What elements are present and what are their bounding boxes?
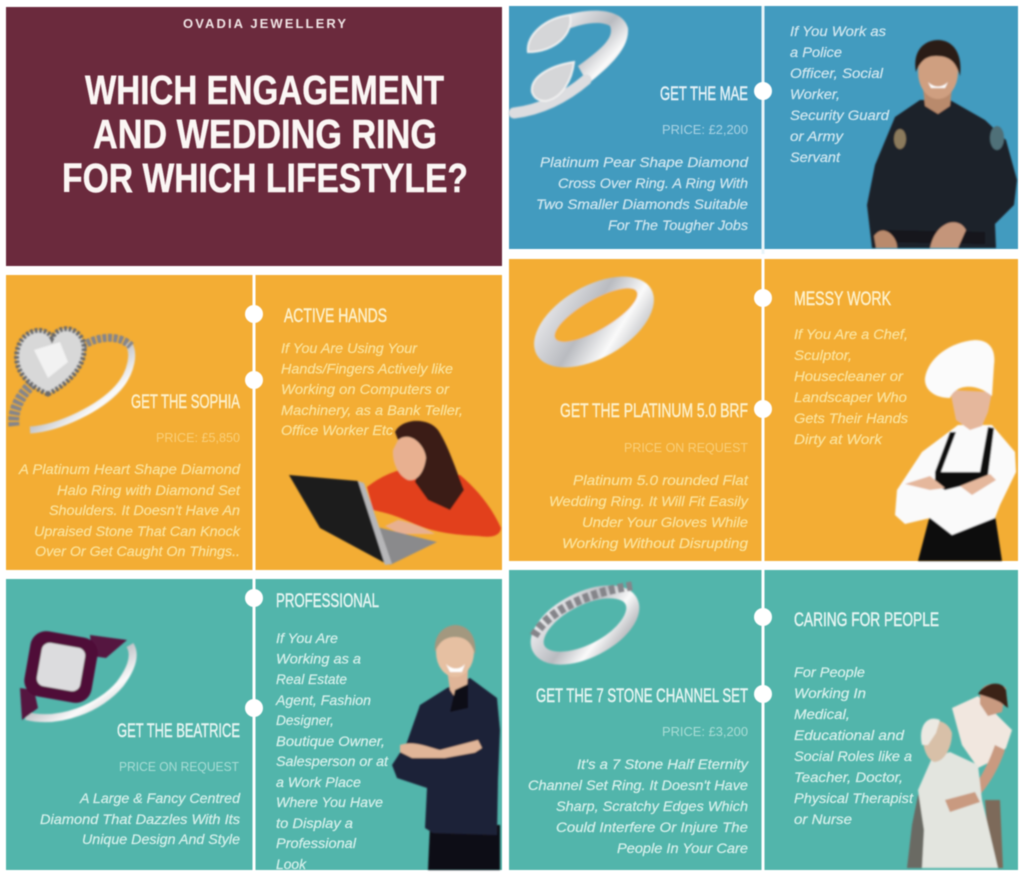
ring description: Could Interfere Or Injure The xyxy=(556,820,748,835)
lifestyle description: Dirty at Work xyxy=(794,432,883,447)
ring name: GET THE 7 STONE CHANNEL SET xyxy=(536,686,748,707)
lifestyle description: Teacher, Doctor, xyxy=(794,770,903,785)
ring description: Wedding Ring. It Will Fit Easily xyxy=(549,494,749,509)
lifestyle heading: MESSY WORK xyxy=(794,289,891,310)
lifestyle description: Landscaper Who xyxy=(794,390,908,405)
lifestyle description: Gets Their Hands xyxy=(794,411,908,426)
ring description: Cross Over Ring. A Ring With xyxy=(558,176,748,191)
lifestyle description: Where You Have xyxy=(276,795,383,810)
brand name: OVADIA JEWELLERY xyxy=(183,16,346,31)
panel: mae / police xyxy=(509,6,1018,256)
icon: chef xyxy=(895,340,1016,561)
ring description: A Large & Fancy Centred xyxy=(79,791,241,806)
lifestyle description: Worker, xyxy=(790,87,840,102)
panel: messy work xyxy=(509,254,1018,564)
lifestyle description: Professional xyxy=(276,836,357,851)
ring name: GET THE MAE xyxy=(660,84,748,105)
lifestyle description: Sculptor, xyxy=(794,348,852,363)
icon: seven stone ring xyxy=(527,578,643,672)
ring description xyxy=(549,473,749,551)
lifestyle description: Servant xyxy=(790,150,841,165)
price: PRICE: £5,850 xyxy=(156,430,240,445)
main title: FOR WHICH LIFESTYLE? xyxy=(62,155,468,201)
lifestyle description: Medical, xyxy=(794,707,850,722)
lifestyle description: Security Guard xyxy=(790,108,890,123)
lifestyle description: to Display a xyxy=(276,816,354,831)
ring name: GET THE BEATRICE xyxy=(117,721,240,742)
ring description: Halo Ring with Diamond Set xyxy=(57,483,241,498)
ring description xyxy=(536,155,749,233)
main title xyxy=(62,67,468,201)
lifestyle description: Look xyxy=(276,857,307,872)
lifestyle description: Boutique Owner, xyxy=(276,734,385,749)
lifestyle description xyxy=(790,24,890,165)
lifestyle description: Machinery, as a Bank Teller, xyxy=(281,403,463,418)
ring description: Two Smaller Diamonds Suitable xyxy=(536,197,748,212)
lifestyle description xyxy=(281,341,463,438)
icon: nurse and patient xyxy=(907,684,1012,868)
main title: AND WEDDING RING xyxy=(93,111,437,157)
icon: platinum band ring xyxy=(519,258,669,386)
ring description: Over Or Get Caught On Things.. xyxy=(35,544,240,559)
lifestyle description: If You Are xyxy=(276,631,338,646)
ring description: Upraised Stone That Can Knock xyxy=(34,524,241,539)
ring description: Platinum Pear Shape Diamond xyxy=(540,155,749,170)
price: PRICE: £3,200 xyxy=(662,724,748,739)
lifestyle description: Working as a xyxy=(276,652,362,666)
panel: active hands xyxy=(6,270,502,575)
ring description: Channel Set Ring. It Doesn't Have xyxy=(528,778,748,793)
lifestyle description: Housecleaner or xyxy=(794,369,904,384)
lifestyle description: a Police xyxy=(790,45,842,60)
price: PRICE ON REQUEST xyxy=(624,440,748,455)
lifestyle description: a Work Place xyxy=(276,775,361,790)
main title: WHICH ENGAGEMENT xyxy=(85,67,444,113)
lifestyle description: Educational and xyxy=(794,728,905,743)
lifestyle description: Agent, Fashion xyxy=(275,693,371,708)
ring name: GET THE SOPHIA xyxy=(131,392,240,413)
lifestyle heading: CARING FOR PEOPLE xyxy=(794,610,939,631)
lifestyle description: or Army xyxy=(790,129,844,144)
ring description: People In Your Care xyxy=(617,841,748,856)
lifestyle description: Officer, Social xyxy=(790,66,884,81)
lifestyle description: Real Estate xyxy=(276,672,347,687)
ring description: For The Tougher Jobs xyxy=(608,218,748,233)
ring description xyxy=(528,757,749,856)
lifestyle description: Working In xyxy=(794,686,866,701)
lifestyle description xyxy=(794,327,908,447)
panel: caring for people xyxy=(509,565,1018,870)
icon: sophia heart ring xyxy=(14,329,132,430)
icon: beatrice ruby ring xyxy=(20,629,133,720)
icon: woman on laptop xyxy=(289,421,501,565)
lifestyle description: Designer, xyxy=(276,713,334,728)
ring description: Platinum 5.0 rounded Flat xyxy=(573,473,749,488)
ring name: GET THE PLATINUM 5.0 BRF xyxy=(560,401,748,422)
ring description: Sharp, Scratchy Edges Which xyxy=(556,799,748,814)
price: PRICE ON REQUEST xyxy=(119,759,239,774)
lifestyle description: For People xyxy=(794,665,865,680)
lifestyle description: or Nurse xyxy=(794,812,852,827)
ring description: Unique Design And Style xyxy=(82,832,240,847)
ring description: Working Without Disrupting xyxy=(562,536,749,551)
ring description xyxy=(40,791,241,847)
lifestyle description xyxy=(794,665,914,827)
ring description: Diamond That Dazzles With Its xyxy=(40,812,240,827)
ring description xyxy=(18,462,241,559)
lifestyle description: If You Are Using Your xyxy=(281,341,418,356)
ring description: Shoulders. It Doesn't Have An xyxy=(49,503,240,518)
panel: title xyxy=(6,7,502,266)
icon: police officer xyxy=(867,40,1017,248)
lifestyle description: Salesperson or at xyxy=(276,754,389,769)
lifestyle heading: PROFESSIONAL xyxy=(276,591,379,612)
lifestyle description xyxy=(275,631,389,872)
icon: mae pear diamond ring xyxy=(514,11,628,113)
lifestyle description: Working on Computers or xyxy=(281,382,450,397)
lifestyle description: Social Roles like a xyxy=(794,749,913,764)
lifestyle description: If You Are a Chef, xyxy=(794,327,908,342)
ring description: Under Your Gloves While xyxy=(582,515,748,530)
lifestyle description: Office Worker Etc xyxy=(281,423,393,438)
lifestyle description: If You Work as xyxy=(790,24,886,39)
ring description: A Platinum Heart Shape Diamond xyxy=(18,462,241,477)
lifestyle description: Hands/Fingers Actively like xyxy=(281,362,453,376)
price: PRICE: £2,200 xyxy=(662,122,748,137)
icon: business woman xyxy=(392,625,500,870)
lifestyle description: Physical Therapist xyxy=(794,791,914,806)
lifestyle heading: ACTIVE HANDS xyxy=(284,306,387,327)
panel: professional xyxy=(6,575,502,872)
ring description: It's a 7 Stone Half Eternity xyxy=(577,757,749,772)
